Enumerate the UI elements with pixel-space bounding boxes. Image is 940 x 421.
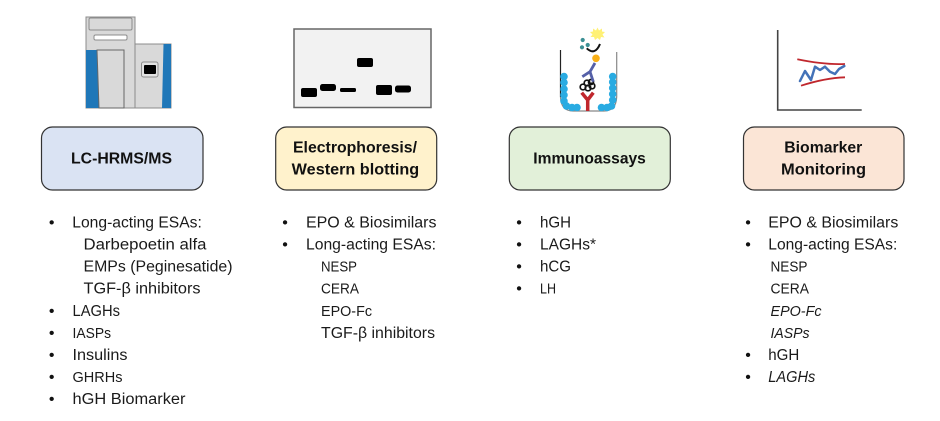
list: Electrophoresis targets <box>282 214 437 342</box>
list: LC-HRMS/MS targets: IASPs <box>72 326 111 342</box>
list: Immunoassay targets: • <box>516 236 522 254</box>
list: Immunoassay targets: hGH <box>540 214 571 232</box>
list: LC-HRMS/MS targets: GHRHs <box>72 370 122 386</box>
list: Immunoassay targets: LAGHs* <box>540 236 596 254</box>
list: Electrophoresis targets: CERA <box>321 282 359 298</box>
list: Immunoassay targets: • <box>516 280 522 298</box>
list: LC-HRMS/MS targets: • <box>49 369 55 386</box>
list: Immunoassay targets: • <box>516 214 522 232</box>
list: Biomarker monitoring targets: • <box>745 347 751 364</box>
list: Biomarker monitoring targets: CERA <box>770 282 809 298</box>
list: LC-HRMS/MS targets <box>49 214 233 408</box>
list: Biomarker monitoring targets: hGH <box>768 347 799 364</box>
list: Electrophoresis targets: • <box>282 214 288 232</box>
box: Electrophoresis/Western blotting: Western blotting <box>292 162 419 178</box>
list: Biomarker monitoring targets: NESP <box>770 260 808 276</box>
list: LC-HRMS/MS targets: EMPs (Peginesatide) <box>84 258 232 276</box>
list: Electrophoresis targets: TGF-β inhibitors <box>321 325 435 342</box>
list: Biomarker monitoring targets: LAGHs <box>768 369 816 386</box>
icon: western blot <box>294 29 431 108</box>
list: LC-HRMS/MS targets: LAGHs <box>72 303 120 320</box>
list: Electrophoresis targets: • <box>282 236 288 254</box>
list: Biomarker monitoring targets: Long-acting ESAs: <box>768 236 897 254</box>
box: Biomarker Monitoring: Biomarker <box>784 140 862 156</box>
list: Biomarker monitoring targets: EPO & Biosimilars <box>768 214 899 232</box>
list: LC-HRMS/MS targets: hGH Biomarker <box>72 391 186 408</box>
list: Electrophoresis targets: NESP <box>321 260 357 276</box>
box: LC-HRMS/MS: LC-HRMS/MS <box>71 150 172 168</box>
list: Immunoassay targets: • <box>516 258 522 276</box>
icon: immunoassay well <box>560 28 617 111</box>
list: Biomarker monitoring targets: EPO-Fc <box>770 304 822 320</box>
box: LC-HRMS/MS <box>42 127 203 190</box>
list: Immunoassay targets: hCG <box>540 258 571 276</box>
list: Electrophoresis targets: EPO-Fc <box>321 304 372 320</box>
list: Biomarker monitoring targets: • <box>745 214 751 232</box>
box: Electrophoresis/Western blotting <box>276 127 437 190</box>
list: LC-HRMS/MS targets: Long-acting ESAs: <box>72 214 202 232</box>
icon: LC-HRMS instrument <box>86 17 171 108</box>
list: Biomarker monitoring targets: • <box>745 236 751 254</box>
list: LC-HRMS/MS targets: Darbepoetin alfa <box>84 236 207 254</box>
box: Immunoassays <box>509 127 670 190</box>
box: Biomarker Monitoring <box>744 127 904 190</box>
list: LC-HRMS/MS targets: • <box>49 347 55 364</box>
list: LC-HRMS/MS targets: Insulins <box>72 347 128 364</box>
list: LC-HRMS/MS targets: • <box>49 214 55 232</box>
list: Electrophoresis targets: Long-acting ESAs: <box>306 236 436 254</box>
list: Immunoassay targets <box>516 214 596 298</box>
list: LC-HRMS/MS targets: • <box>49 325 55 342</box>
list: Immunoassay targets: LH <box>540 282 556 298</box>
list: LC-HRMS/MS targets: • <box>49 303 55 320</box>
list: Biomarker monitoring targets: • <box>745 369 751 386</box>
box: Biomarker Monitoring: Monitoring <box>781 162 866 178</box>
icon: biomarker monitoring chart <box>778 30 862 110</box>
list: Biomarker monitoring targets: IASPs <box>770 326 810 342</box>
box: Immunoassays: Immunoassays <box>533 150 646 168</box>
list: Electrophoresis targets: EPO & Biosimilars <box>306 214 437 232</box>
list: LC-HRMS/MS targets: • <box>49 391 55 408</box>
list: Biomarker monitoring targets <box>745 214 899 386</box>
list: LC-HRMS/MS targets: TGF-β inhibitors <box>84 280 201 298</box>
box: Electrophoresis/Western blotting: Electrophoresis/ <box>293 140 418 156</box>
